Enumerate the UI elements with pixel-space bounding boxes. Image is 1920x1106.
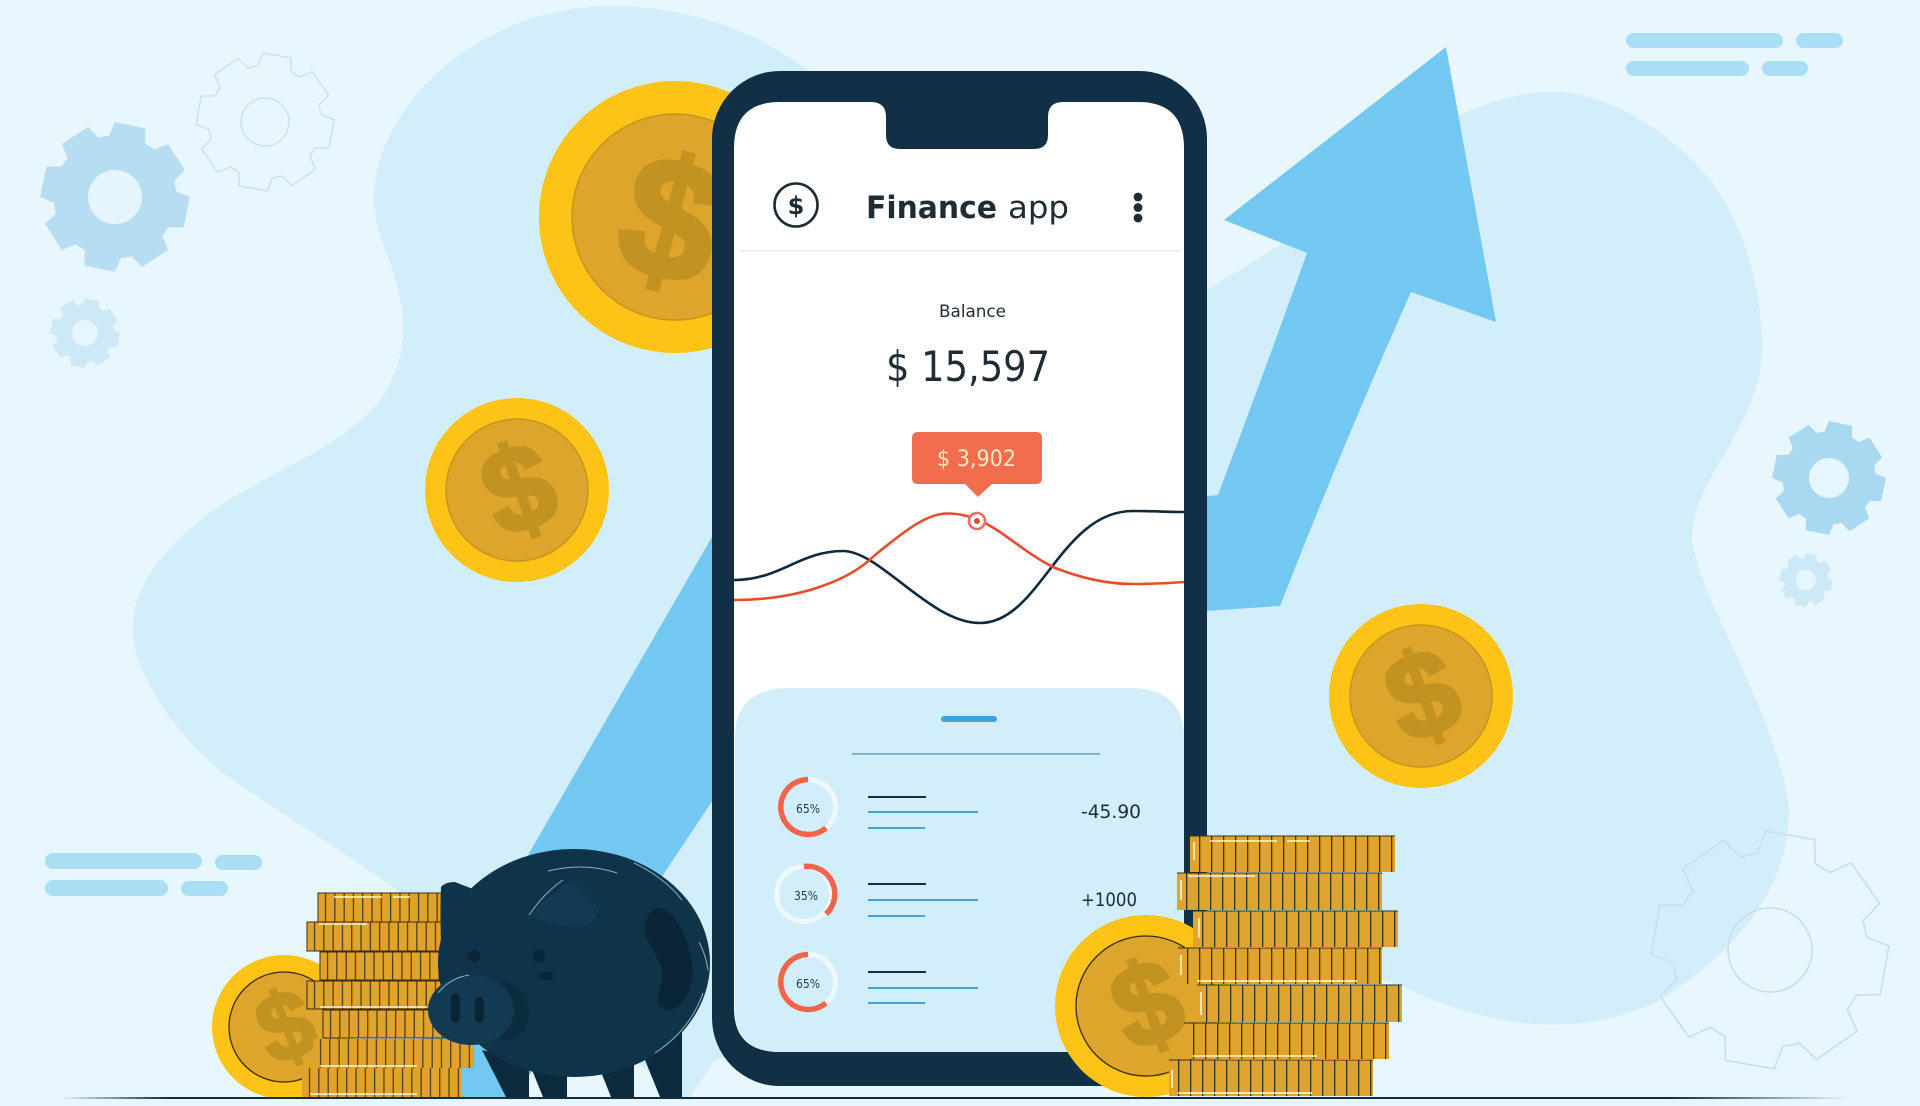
legs <box>482 1030 682 1097</box>
piggy bank <box>428 849 710 1097</box>
back shadow <box>644 908 693 1010</box>
tooltip: $ 3,902 <box>937 446 1016 472</box>
body highlights <box>438 863 708 1053</box>
gear: solid small right <box>1775 549 1837 611</box>
row 3: lines <box>868 971 978 1004</box>
row 3: ring: 65% <box>796 976 820 991</box>
snout shadow <box>500 980 529 1041</box>
header: dollar icon: $ <box>788 192 804 220</box>
phone screen <box>734 102 1184 1052</box>
header: title: app <box>1008 190 1069 226</box>
growth arrow <box>388 47 1496 1097</box>
coin stack: left <box>302 893 483 1097</box>
bottom panel <box>735 688 1184 1052</box>
row 2: lines <box>868 883 978 917</box>
body <box>438 849 710 1077</box>
phone <box>712 71 1207 1086</box>
decorative bars: bottom left <box>45 853 262 896</box>
left ear <box>440 882 515 945</box>
balance label: Balance <box>939 302 1006 321</box>
coin: middle right: $ <box>1368 621 1477 769</box>
line chart <box>734 511 1184 623</box>
row 2: ring: 35% <box>794 888 818 903</box>
eyes <box>468 950 554 980</box>
decorative bars: top right <box>1626 33 1843 76</box>
tooltip <box>912 432 1042 497</box>
panel handle <box>941 716 997 722</box>
background blob: left <box>133 6 830 1097</box>
right ear <box>530 880 600 926</box>
background blob: right <box>1100 92 1789 1025</box>
coin: middle right <box>1329 604 1513 788</box>
coin: middle left: $ <box>464 415 573 563</box>
row 1: ring: 65% <box>796 801 820 816</box>
balance amount: $ 15,597 <box>886 342 1050 391</box>
coin stack: right <box>1169 836 1402 1096</box>
gear: outline bottom right <box>1635 815 1905 1085</box>
row 2: value: +1000 <box>1081 890 1137 911</box>
gear: solid large right <box>1763 412 1895 544</box>
row 3: ring <box>780 954 836 1010</box>
row 1: ring <box>780 780 836 834</box>
coin: top behind phone: $ <box>600 116 741 324</box>
header: dollar icon <box>774 184 818 226</box>
header: menu dots <box>1134 193 1142 222</box>
snout <box>428 975 514 1045</box>
gear: solid large top left <box>28 110 202 284</box>
row 2: ring <box>776 866 835 922</box>
coin: bottom left: $ <box>242 967 329 1086</box>
gear: solid small left <box>44 292 126 374</box>
ground line <box>60 1097 1850 1099</box>
coin: top behind phone <box>539 81 811 353</box>
coin: bottom right <box>1055 915 1237 1097</box>
phone body <box>712 71 1207 1086</box>
header: title: Finance <box>866 190 997 226</box>
row 1: value: -45.90 <box>1081 802 1141 823</box>
row 1: lines <box>868 796 978 829</box>
coin: bottom left <box>212 955 356 1099</box>
gear: outline top left <box>187 44 343 200</box>
coin: bottom right: $ <box>1095 932 1200 1076</box>
coin: middle left <box>425 398 609 582</box>
